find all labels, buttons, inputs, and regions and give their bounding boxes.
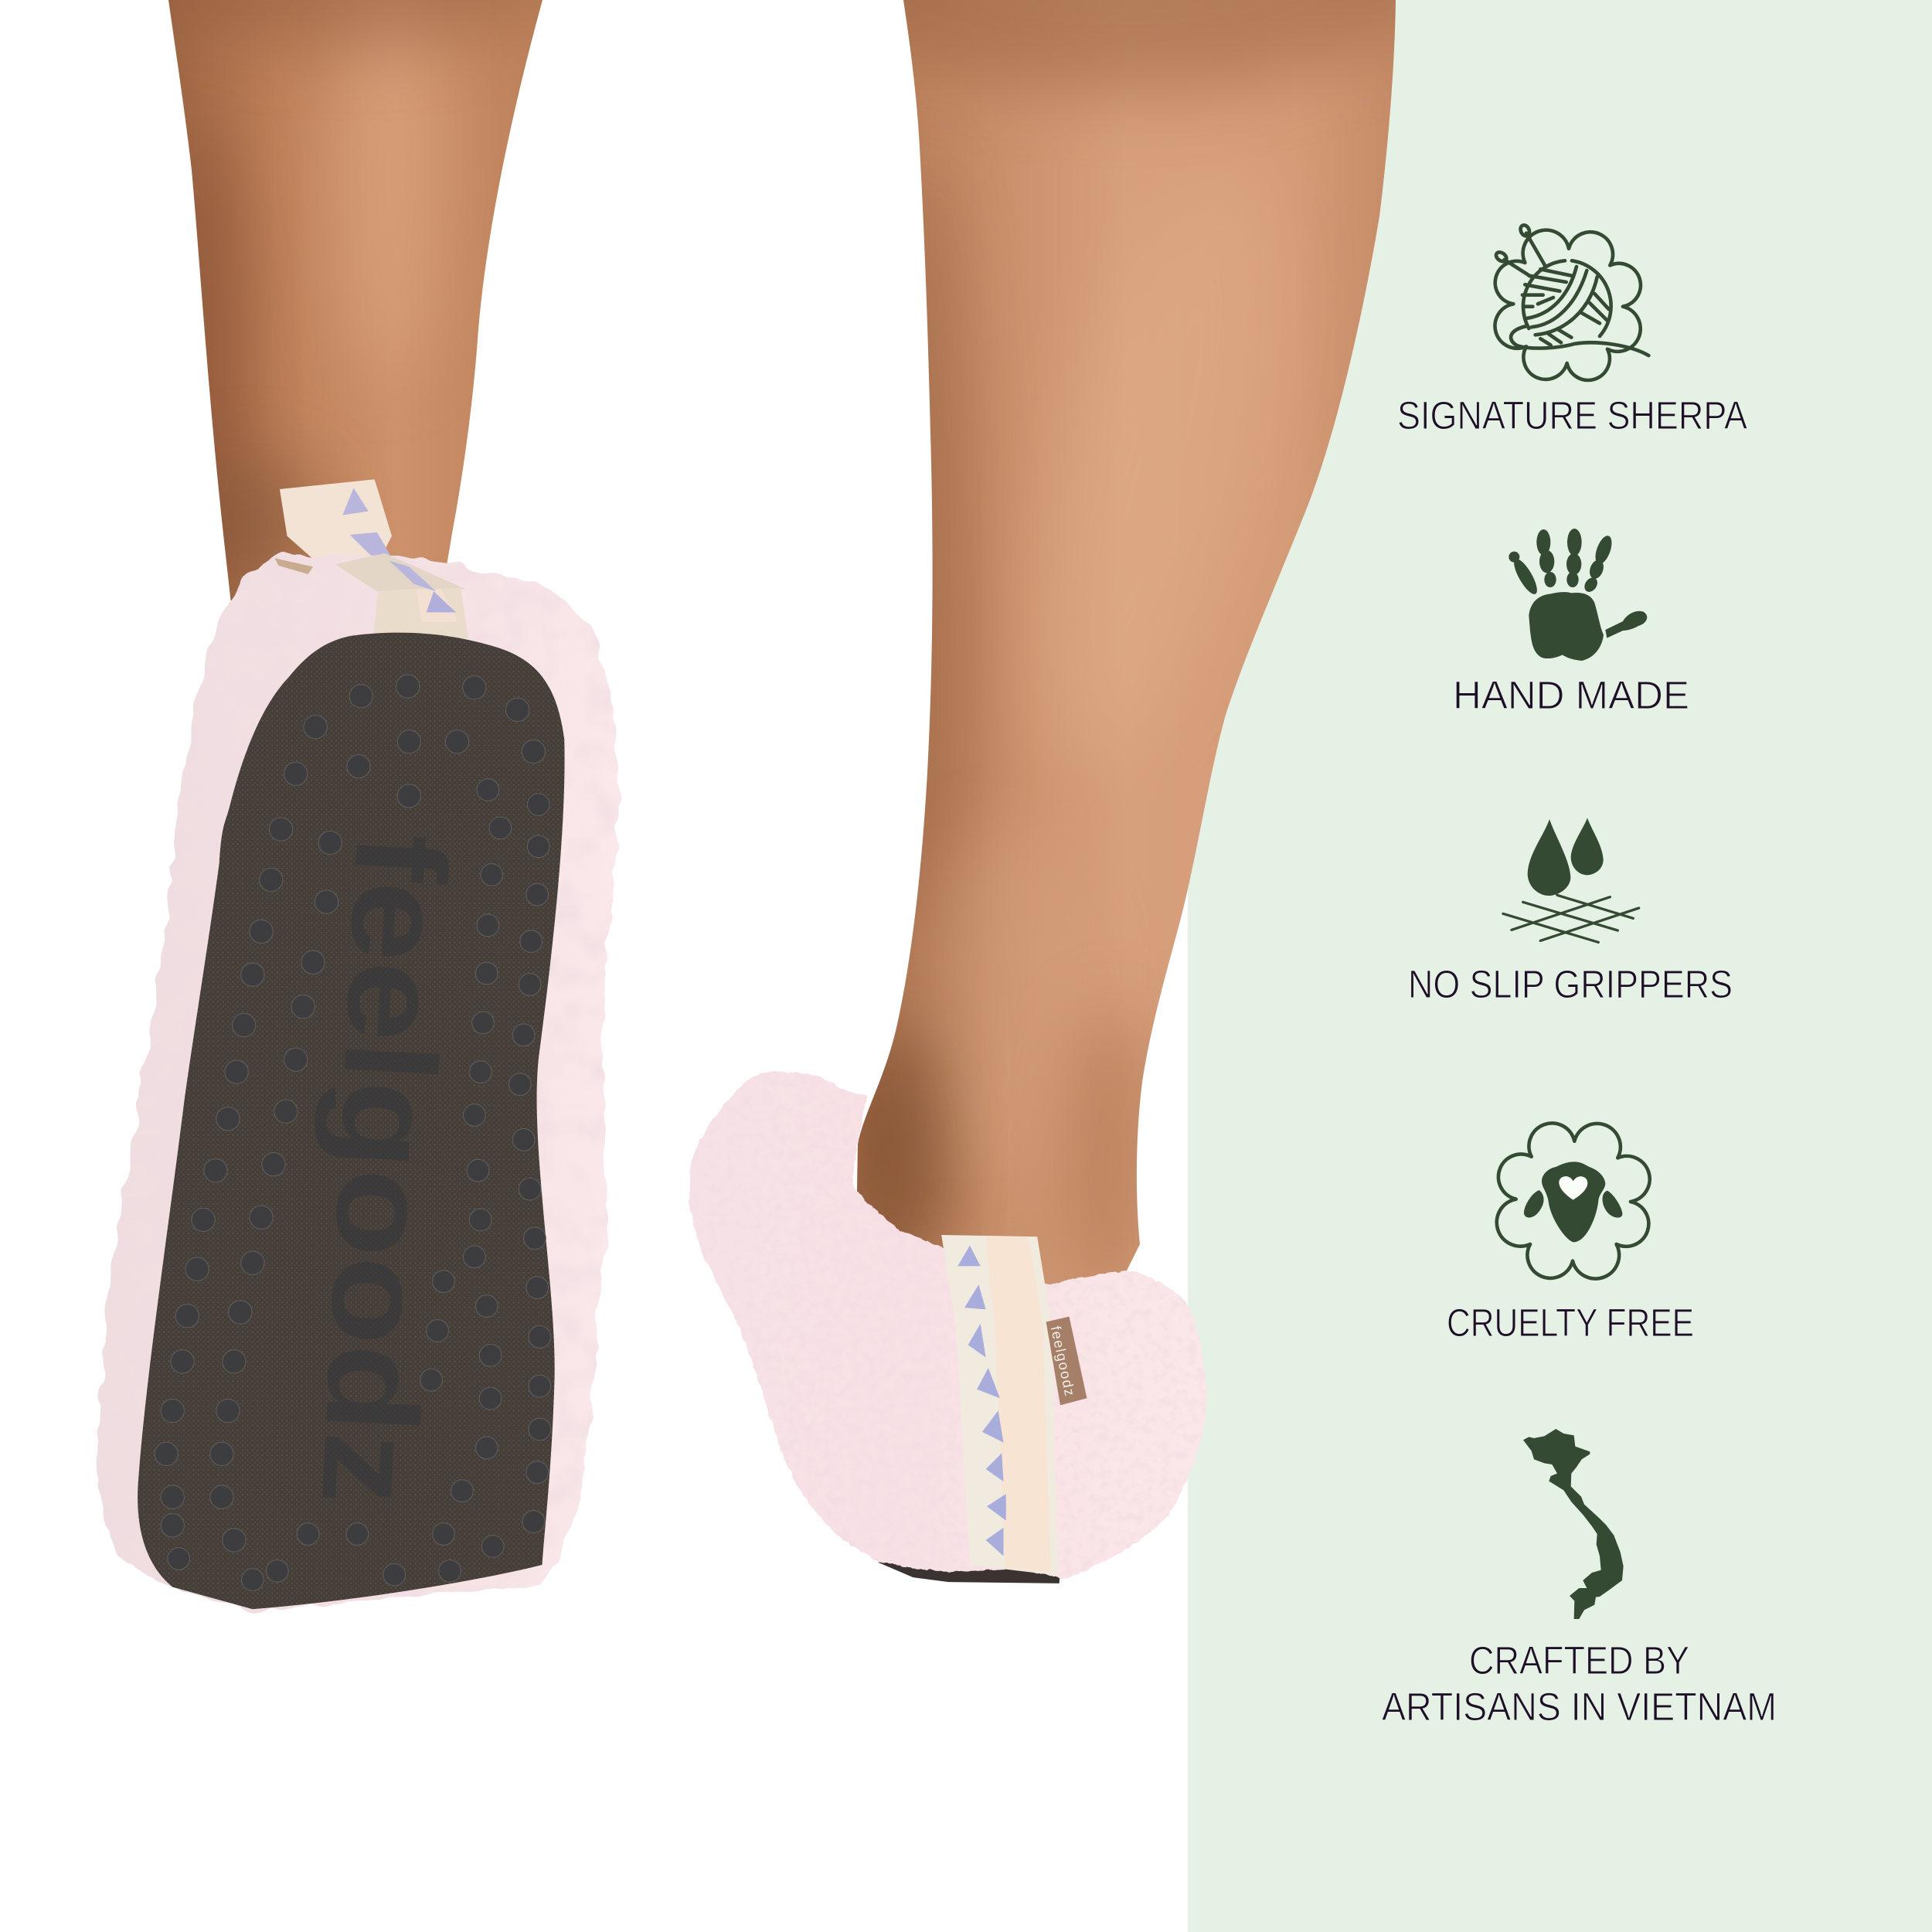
sherpa upper [97,554,618,1611]
icon: water drops on grid [1503,818,1639,942]
icon: map of Vietnam [1523,1429,1624,1619]
side label: feelgoodz [1048,1325,1078,1397]
side label [1046,1317,1087,1405]
icon: hand print [1509,529,1647,661]
label: cruelty free: CRUELTY FREE [1447,1301,1694,1345]
icon: yarn ball flower [1495,223,1648,380]
photo: left slipper seen from below [97,479,618,1611]
photo: right slipper [689,1072,1208,1583]
panel: green features background [1188,0,1932,1932]
label: hand made: HAND MADE [1453,673,1689,717]
heel strap [941,1235,1059,1576]
slipper pull tab [280,479,394,579]
rubber sole [138,633,565,1609]
sherpa upper [689,1072,1208,1579]
photo: left leg [168,0,543,601]
label: no slip grippers: NO SLIP GRIPPERS [1408,962,1733,1006]
sole strip [878,1562,1060,1583]
photo: right leg [857,0,1396,1284]
tab stitched on heel [275,553,468,638]
label: crafted by artisans in vietnam: ARTISANS IN VIETNAM [1382,1685,1777,1729]
label: crafted by artisans in vietnam [1382,1638,1777,1729]
label: crafted by artisans in vietnam: CRAFTED BY [1469,1638,1689,1682]
icon: sheep flower [1497,1123,1650,1279]
label: signature sherpa: SIGNATURE SHERPA [1397,393,1747,437]
sole brand text: feelgoodz [294,830,474,1509]
no slip gripper dots [155,675,551,1590]
